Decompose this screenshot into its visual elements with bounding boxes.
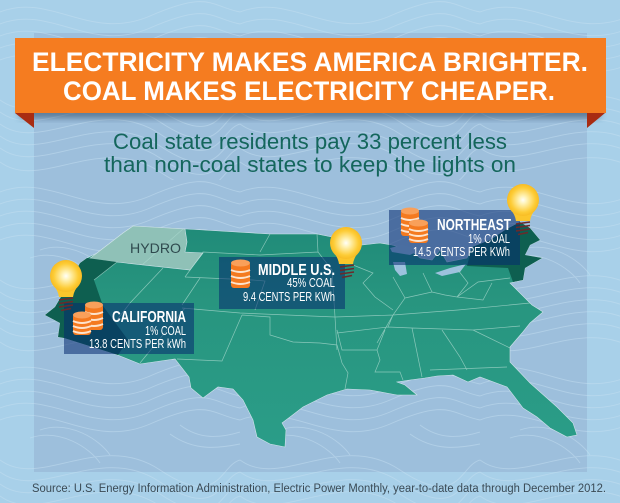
icon: light bulb California: [50, 260, 82, 310]
region: California: [45, 258, 128, 355]
ribbon fold: left: [15, 113, 34, 128]
Middle U.S. text: MIDDLE U.S.: [258, 262, 335, 279]
title line 1: ELECTRICITY MAKES AMERICA BRIGHTER.: [32, 47, 588, 77]
California text: CALIFORNIA: [112, 309, 186, 326]
land: lower 48 states: [45, 222, 577, 447]
title line 2: COAL MAKES ELECTRICITY CHEAPER.: [63, 76, 555, 106]
icon: light bulb Northeast: [507, 184, 539, 234]
region: Northeast: [467, 222, 542, 282]
Middle U.S. text: 45% COAL: [287, 275, 335, 290]
title banner: [15, 38, 606, 113]
icon: Middle U.S. coal stack: [231, 260, 250, 288]
California text: [89, 309, 186, 351]
Northeast text: [413, 217, 511, 259]
ribbon fold: right: [587, 113, 605, 128]
icon: Northeast coal stacks: [401, 208, 428, 243]
Middle U.S. text: 9.4 CENTS PER KWh: [243, 289, 335, 304]
Middle U.S. text: [243, 262, 335, 304]
lakes: [390, 245, 466, 276]
panel: map backdrop: [34, 33, 587, 472]
region: hydro Northwest: [89, 226, 203, 270]
Northeast text: 1% COAL: [468, 231, 510, 246]
Northeast text: NORTHEAST: [437, 217, 511, 234]
hydro label: HYDRO: [130, 240, 181, 256]
banner shadow: [20, 108, 600, 118]
California text: 13.8 CENTS PER kWh: [89, 336, 186, 351]
source note: Source: U.S. Energy Information Administration, Electric Power Monthly, year-to-date data through December 2012.: [32, 483, 606, 495]
icon: light bulb Middle U.S.: [330, 227, 362, 278]
subtitle: [104, 129, 516, 177]
California text: 1% COAL: [145, 323, 186, 338]
state borders: [94, 229, 530, 389]
map of the United States: [45, 222, 577, 447]
callout: Northeast: [389, 208, 520, 265]
subtitle: than non-coal states to keep the lights on: [104, 152, 516, 177]
Northeast text: 14.5 CENTS PER KWh: [413, 244, 510, 259]
icon: California coal stacks: [73, 302, 103, 335]
subtitle: Coal state residents pay 33 percent less: [113, 129, 507, 154]
callout: California: [64, 302, 194, 354]
callout: Middle U.S.: [219, 257, 345, 309]
